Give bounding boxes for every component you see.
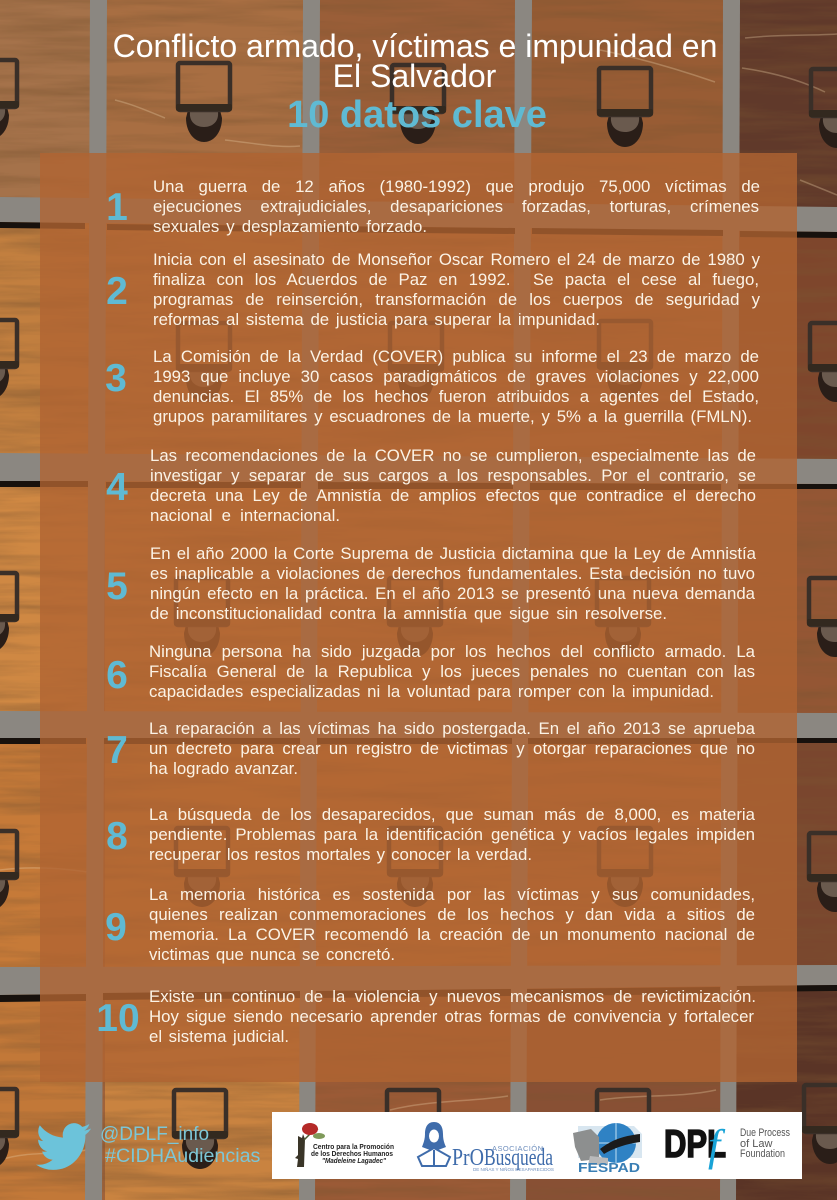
number 1: 1 [106,186,128,229]
hashtag: #CIDHAudiencias: #CIDHAudiencias [105,1145,260,1167]
fact 6 [106,642,755,701]
fact 1 [106,177,760,236]
text: fact 4: Las recomendaciones de la COVER no se cumplieron, especialmente las de [150,446,756,465]
logo: Asociación Pro-Búsqueda: Busqueda [484,1145,553,1171]
logo: DPLF: DPL [664,1123,726,1166]
logo: Centro Madeleine Lagadec [295,1123,394,1167]
logo: DPLF: Due Process [740,1127,790,1139]
fact 2 [106,250,760,329]
text: fact 3: 1993 que incluye 30 casos paradigmáticos de graves violaciones y 22,000 [153,367,759,386]
number 6: 6 [106,654,128,697]
text: fact 2: Inicia con el asesinato de Monseñor Oscar Romero el 24 de marzo de 1980 y [153,250,760,269]
panel: translucent orange text background [40,153,797,1082]
number 8: 8 [106,815,128,858]
logo: Centro Madeleine Lagadec: "Madeleine Lagadec" [322,1156,386,1165]
text: fact 2: reformas al sistema de justicia para superar la impunidad. [153,310,600,329]
text: fact 6: capacidades especializadas ni la voluntad para romper con la impunidad. [149,682,714,701]
logo: DPLF [664,1121,790,1170]
social handles [100,1124,260,1167]
title [113,28,717,136]
fact 9 [105,885,755,964]
fact 10 [96,987,756,1046]
text: fact 9: victimas que nunca se concretó. [149,945,395,964]
text: fact 10: Hoy sigue siendo necesario aprender otras formas de convivencia y fortalecer [149,1007,754,1026]
logo: DPLF: Foundation [740,1148,785,1160]
handle: @DPLF_info: @DPLF_info [100,1124,209,1145]
text: fact 5: ningún efecto en la práctica. En el año 2013 se presentó una nueva demanda [150,584,755,603]
title line 1: Conflicto armado, víctimas e impunidad en [113,28,717,64]
fact 4 [106,446,756,525]
text: fact 1 [153,177,760,236]
number 9: 9 [105,906,127,949]
text: fact 7 [149,719,755,778]
text: fact 7: ha logrado avanzar. [149,759,298,778]
fact 3 [105,347,759,426]
number 4: 4 [106,466,128,509]
text: fact 4: decreta una Ley de Amnistía de amplios efectos que contradice el derecho [150,486,756,505]
logo: Asociación Pro-Búsqueda: ASOCIACIÓN [492,1144,543,1153]
text: fact 1: sexuales y desplazamiento forzado. [153,217,427,236]
text: fact 2 [153,250,760,329]
text: fact 5 [150,544,756,623]
fact 5 [106,544,756,623]
number 5: 5 [106,565,128,608]
text: fact 8: La búsqueda de los desaparecidos, que suman más de 8,000, es materia [149,805,755,824]
fact 8 [106,805,755,864]
logo: FESPAD [573,1123,642,1175]
text: fact 10 [149,987,756,1046]
text: fact 2: programas de reinserción, transformación de los cuerpos de seguridad y [153,290,760,309]
text: fact 5: de inconstitucionalidad contra la amnistía que sigue sin resolverse. [150,604,667,623]
text: fact 10: el sistema judicial. [149,1027,289,1046]
text: fact 7: un decreto para crear un registro de victimas y otorgar reparaciones que no [149,739,755,758]
number 7: 7 [106,729,128,772]
logo: DPLF: of Law [740,1138,772,1150]
logo: Asociación Pro-Búsqueda: DE NIÑAS Y NIÑOS DESAPARECIDOS [473,1166,554,1172]
text: fact 8 [149,805,755,864]
text: fact 9: quienes realizan conmemoraciones de los hechos y dan vida a sitios de [149,905,755,924]
logo: Asociación Pro-Búsqueda: PrO [452,1145,484,1171]
text: fact 9: La memoria histórica es sostenida por las víctimas y sus comunidades, [149,885,755,904]
text: fact 9: memoria. La COVER recomendó la creación de un monumento nacional de [149,925,755,944]
text: fact 3: grupos paramilitares y escuadrones de la muerte, y 5% a la guerrilla (FMLN). [153,407,752,426]
logo: FESPAD: FESPAD [578,1160,640,1175]
text: fact 10: Existe un continuo de la violencia y nuevos mecanismos de revictimización. [149,987,756,1006]
number 3: 3 [105,357,127,400]
title line 2: El Salvador [333,58,496,94]
logo: Asociación Pro-Búsqueda [418,1122,554,1172]
text: fact 1: ejecuciones extrajudiciales, desapariciones forzadas, torturas, crímenes [153,197,759,216]
text: fact 2: finaliza con los Acuerdos de Paz en 1992. Se pacta el cese al fuego, [153,270,759,289]
subtitle: 10 datos clave: 10 datos clave [287,94,547,136]
logo: Centro Madeleine Lagadec: de los Derechos Humanos [311,1149,393,1158]
text: fact 8: pendiente. Problemas para la identificación genética y vacíos legales impiden [149,825,755,844]
logos strip [272,1112,802,1179]
icon: twitter bird [36,1123,91,1170]
text: fact 1: Una guerra de 12 años (1980-1992) que produjo 75,000 víctimas de [153,177,760,196]
text: fact 7: La reparación a las víctimas ha sido postergada. En el año 2013 se aprueba [149,719,755,738]
text: fact 8: recuperar los restos mortales y conocer la verdad. [149,845,532,864]
text: fact 9 [149,885,755,964]
logo: DPLF: f [708,1121,726,1170]
fact 7 [106,719,755,778]
number 2: 2 [106,270,128,313]
text: fact 3: denuncias. El 85% de los hechos fueron atribuidos a agentes del Estado, [153,387,759,406]
text: fact 4: nacional e internacional. [150,506,340,525]
text: fact 4 [150,446,756,525]
text: fact 4: investigar y separar de sus cargos a los responsables. Por el contrario, se [150,466,756,485]
text: fact 5: En el año 2000 la Corte Suprema de Justicia dictamina que la Ley de Amnistía [150,544,756,563]
text: fact 6 [149,642,755,701]
text: fact 3: La Comisión de la Verdad (COVER) publica su informe el 23 de marzo de [153,347,759,366]
text: fact 3 [153,347,759,426]
number 10: 10 [96,997,140,1040]
text: fact 5: es inaplicable a violaciones de derechos fundamentales. Esta decisión no tuvo [150,564,755,583]
text: fact 6: Fiscalía General de la Republica y los jueces penales no cuentan con las [149,662,755,681]
logo: Centro Madeleine Lagadec: Centro para la Promoción [313,1142,394,1151]
text: fact 6: Ninguna persona ha sido juzgada por los hechos del conflicto armado. La [149,642,755,661]
